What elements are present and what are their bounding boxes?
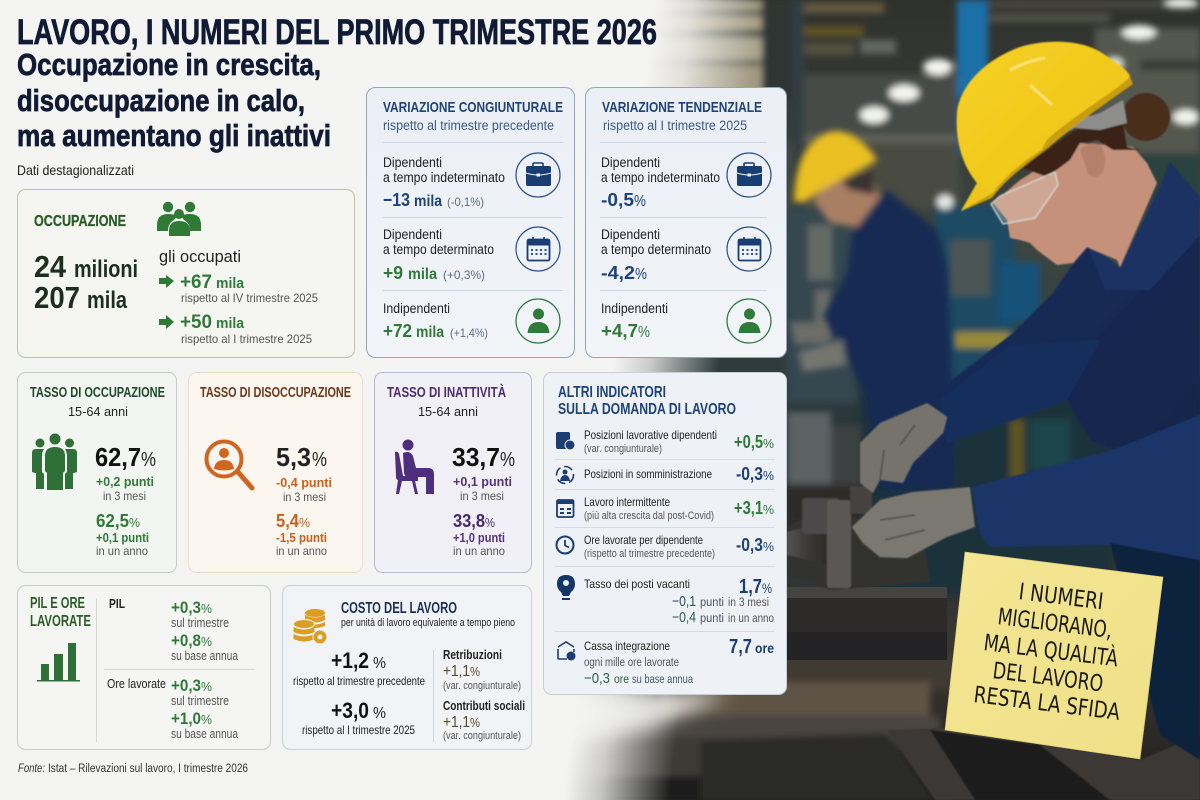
icon: calendar [727,227,771,271]
row: ore lavorate: % [763,539,774,554]
row: indeterminato: a tempo indeterminato [601,170,720,185]
main values: % [373,705,386,722]
row: lavoro intermittente: (più alta crescita dal post-Covid) [584,510,714,522]
row: posti vacanti: punti [700,613,724,625]
row: posti vacanti: punti [700,597,724,609]
values: 5,4 [276,510,300,531]
ore lavorate values [107,676,238,741]
row: lavoro intermittente: % [763,502,774,517]
heading: COSTO DEL LAVORO [341,600,457,617]
row: cassa integrazione: Cassa integrazione [584,639,670,653]
row: posizioni lavorative [556,428,774,455]
values: in un anno [96,544,148,558]
title: LAVORO, I NUMERI DEL PRIMO TRIMESTRE 2026 [17,13,657,52]
main figure: mila [87,287,128,314]
heading: occupazione: OCCUPAZIONE [34,213,126,230]
row: indeterminato: -0,5 [601,189,634,210]
ore lavorate values: % [201,679,212,694]
heading: VARIAZIONE CONGIUNTURALE [383,99,563,116]
pil values: su base annua [171,649,238,663]
icon: briefcase [516,153,560,197]
values [95,444,156,558]
heading: LAVORATE [30,613,91,630]
icon: magnifier with person [206,442,252,488]
row: somministrazione: -0,3 [736,463,763,484]
change on year: mila [216,315,245,332]
row: determinato: -4,2 [601,262,635,283]
row: posti vacanti: 1,7 [739,576,762,598]
row: posti vacanti: −0,1 [672,593,696,610]
values [276,444,332,558]
pil values: PIL [109,596,125,611]
row: somministrazione: % [763,468,774,483]
values: +0,1 punti [96,530,149,545]
heading: TASSO DI DISOCCUPAZIONE [200,385,351,401]
row: determinato: % [635,266,647,283]
change on quarter: rispetto al IV trimestre 2025 [181,291,318,305]
row: indeterminato: (-0,1%) [447,195,484,209]
row: posti vacanti: in 3 mesi [728,597,769,609]
icon: calendar [516,227,560,271]
row: lavoro intermittente: +3,1 [734,497,763,518]
main values: rispetto al I trimestre 2025 [302,723,415,737]
panel: costo del lavoro [282,586,532,750]
components: Contributi sociali [443,699,525,713]
row: indipendenti [601,301,668,341]
icon: person [727,299,771,343]
row: indeterminato: mila [414,193,442,210]
row: indipendenti: % [638,324,650,341]
row: indeterminato: a tempo indeterminato [383,170,505,185]
heading: SULLA DOMANDA DI LAVORO [558,401,736,418]
row: cassa integrazione: ore [755,640,774,656]
sticky note: DEL LAVORO [991,658,1105,697]
pil values: +0,3 [171,598,201,617]
row: indipendenti: +72 [383,320,412,341]
components: % [470,715,480,730]
components: +1,1 [443,663,470,680]
values: 33,7 [452,444,500,472]
sticky note [945,552,1163,759]
row: posti vacanti: Tasso dei posti vacanti [584,577,690,591]
change on quarter: mila [216,275,245,292]
heading: TASSO DI INATTIVITÀ [387,384,506,401]
row: determinato: Dipendenti [601,227,660,242]
soft light haze at lower edge of photo [530,690,730,748]
values: % [485,515,495,530]
values: % [141,449,156,471]
change on quarter: +67 [180,271,212,293]
ore lavorate values: +0,3 [171,676,201,695]
row: cassa integrazione: ogni mille ore lavorate [584,657,679,669]
row: cassa integrazione: su base annua [632,674,693,686]
row: ore lavorate: -0,3 [736,534,763,555]
label: gli occupati: gli occupati [159,247,241,266]
main values: +1,2 [331,648,369,673]
panel: tasso di disoccupazione [188,372,362,572]
icon: briefcase [727,153,771,197]
subheading: rispetto al I trimestre 2025 [603,118,747,133]
row: determinato: a tempo determinato [601,242,711,257]
sticky note: MA LA QUALITÀ [982,628,1120,672]
heading [30,595,91,630]
row: indeterminato: −13 [383,189,410,210]
row: lavoro intermittente [557,495,774,522]
row: indeterminato: Dipendenti [601,155,660,170]
values: in 3 mesi [103,489,146,503]
components [443,648,525,742]
change on year: rispetto al I trimestre 2025 [181,332,312,346]
soft fade from page background into photo [500,0,800,800]
values: in 3 mesi [283,490,326,504]
sticky note: RESTA LA SFIDA [972,682,1122,726]
panel: pil e ore lavorate [18,586,270,750]
values: in un anno [276,544,327,558]
main values: rispetto al trimestre precedente [293,674,425,688]
source: Istat – Rilevazioni sul lavoro, I trimestre 2026 [48,763,248,775]
row: somministrazione: Posizioni in somministrazione [584,467,712,481]
components: +1,1 [443,714,470,731]
subtitle: Occupazione in crescita, [17,48,321,82]
ore lavorate values: su base annua [171,727,238,741]
ore lavorate values: sul trimestre [171,694,229,708]
components: % [470,664,480,679]
source: Fonte: [18,763,45,775]
row: indeterminato: Dipendenti [383,155,442,170]
icon: person [516,299,560,343]
pil values: % [201,634,212,649]
main values: % [373,655,386,672]
main figure [34,249,138,315]
row: determinato [383,227,494,283]
row: posti vacanti: in un anno [728,613,774,625]
subheading: rispetto al trimestre precedente [383,118,554,133]
main figure: 207 [34,280,80,315]
row: somministrazione [556,463,774,484]
subtitle: disoccupazione in calo, [17,84,305,118]
values: % [129,515,140,530]
row: indipendenti: Indipendenti [601,301,668,316]
panel: variazione congiunturale [366,88,574,358]
values: % [299,515,310,530]
row: ore lavorate: Ore lavorate per dipendente [584,533,703,547]
ore lavorate values: Ore lavorate [107,676,166,691]
heading: ALTRI INDICATORI [558,384,666,401]
values [452,444,515,558]
values: in un anno [453,544,505,558]
panel: occupazione [18,190,354,358]
pil values: +0,8 [171,631,201,650]
main figure: milioni [74,256,138,283]
note: seasonally adjusted: Dati destagionalizzati [17,162,134,178]
row: cassa integrazione: 7,7 [729,636,752,658]
age range: 15-64 anni [68,404,128,419]
row: determinato [601,227,711,283]
values: 33,8 [453,510,485,531]
change on quarter [159,271,318,305]
icon: bar chart [37,643,80,682]
row: posizioni lavorative: +0,5 [734,431,763,452]
row: ore lavorate: (rispetto al trimestre precedente) [584,548,715,560]
row: indeterminato: % [634,193,646,210]
values: -1,5 punti [276,530,327,545]
icon: three people [32,434,77,490]
main figure: 24 [34,249,67,284]
values: 62,7 [95,444,141,472]
heading: PIL E ORE [30,595,85,612]
row: cassa integrazione: ore [614,674,629,686]
pil values: sul trimestre [171,616,229,630]
photo: factory workers [560,0,1200,800]
row: posizioni lavorative: % [763,436,774,451]
change on year [159,311,312,346]
icon: people group [157,202,201,236]
sticky note: I NUMERI [1017,579,1105,615]
row: posizioni lavorative: Posizioni lavorative dipendenti [584,428,717,442]
panel: altri indicatori [544,372,786,694]
panel: tasso di inattività [374,372,532,572]
row: determinato: (+0,3%) [443,268,485,282]
age range: 15-64 anni [418,404,478,419]
subtitle: ma aumentano gli inattivi [17,119,331,153]
row: determinato: Dipendenti [383,227,442,242]
row: indipendenti: (+1,4%) [450,326,488,340]
subtitle [17,48,331,153]
row: determinato: mila [408,266,437,283]
row: lavoro intermittente: Lavoro intermittente [584,495,670,509]
row: indipendenti: Indipendenti [383,301,450,316]
values: % [500,449,515,471]
subheading: per unità di lavoro equivalente a tempo pieno [341,617,515,629]
row: indipendenti: mila [416,324,444,341]
row: indipendenti [383,301,488,341]
values: +0,1 punti [453,474,512,489]
row: ore lavorate [556,533,774,560]
row: indipendenti: +4,7 [601,320,638,341]
row: indeterminato [601,155,720,210]
heading: VARIAZIONE TENDENZIALE [602,99,762,116]
values: +0,2 punti [96,474,154,489]
row: posizioni lavorative: (var. congiunturale) [584,443,662,455]
main values [293,648,425,737]
row: posti vacanti: −0,4 [672,609,696,626]
ore lavorate values: +1,0 [171,709,201,728]
row: posti vacanti: % [762,580,772,596]
values: in 3 mesi [460,489,504,503]
row: posti vacanti [557,575,774,626]
ore lavorate values: % [201,712,212,727]
values: 5,3 [276,444,311,472]
row: cassa integrazione [558,636,774,687]
pil values: % [201,601,212,616]
panel: variazione tendenziale [586,88,786,358]
icon: seated person [395,440,434,494]
row: cassa integrazione: −0,3 [584,670,610,687]
row: determinato: +9 [383,262,403,283]
icon: coins [294,609,327,644]
values: 62,5 [96,510,129,531]
values: -0,4 punti [276,475,332,490]
components: Retribuzioni [443,648,502,662]
main values: +3,0 [331,698,369,723]
row: determinato: a tempo determinato [383,242,494,257]
heading [558,384,736,418]
pil values [109,596,238,663]
values: % [312,449,327,471]
components: (var. congiunturale) [443,680,521,692]
values: +1,0 punti [453,530,505,545]
row: indeterminato [383,155,505,210]
heading: TASSO DI OCCUPAZIONE [30,385,165,401]
panel: tasso di occupazione [18,372,176,572]
sticky note: MIGLIORANO, [996,604,1114,644]
change on year: +50 [180,311,212,333]
components: (var. congiunturale) [443,730,521,742]
